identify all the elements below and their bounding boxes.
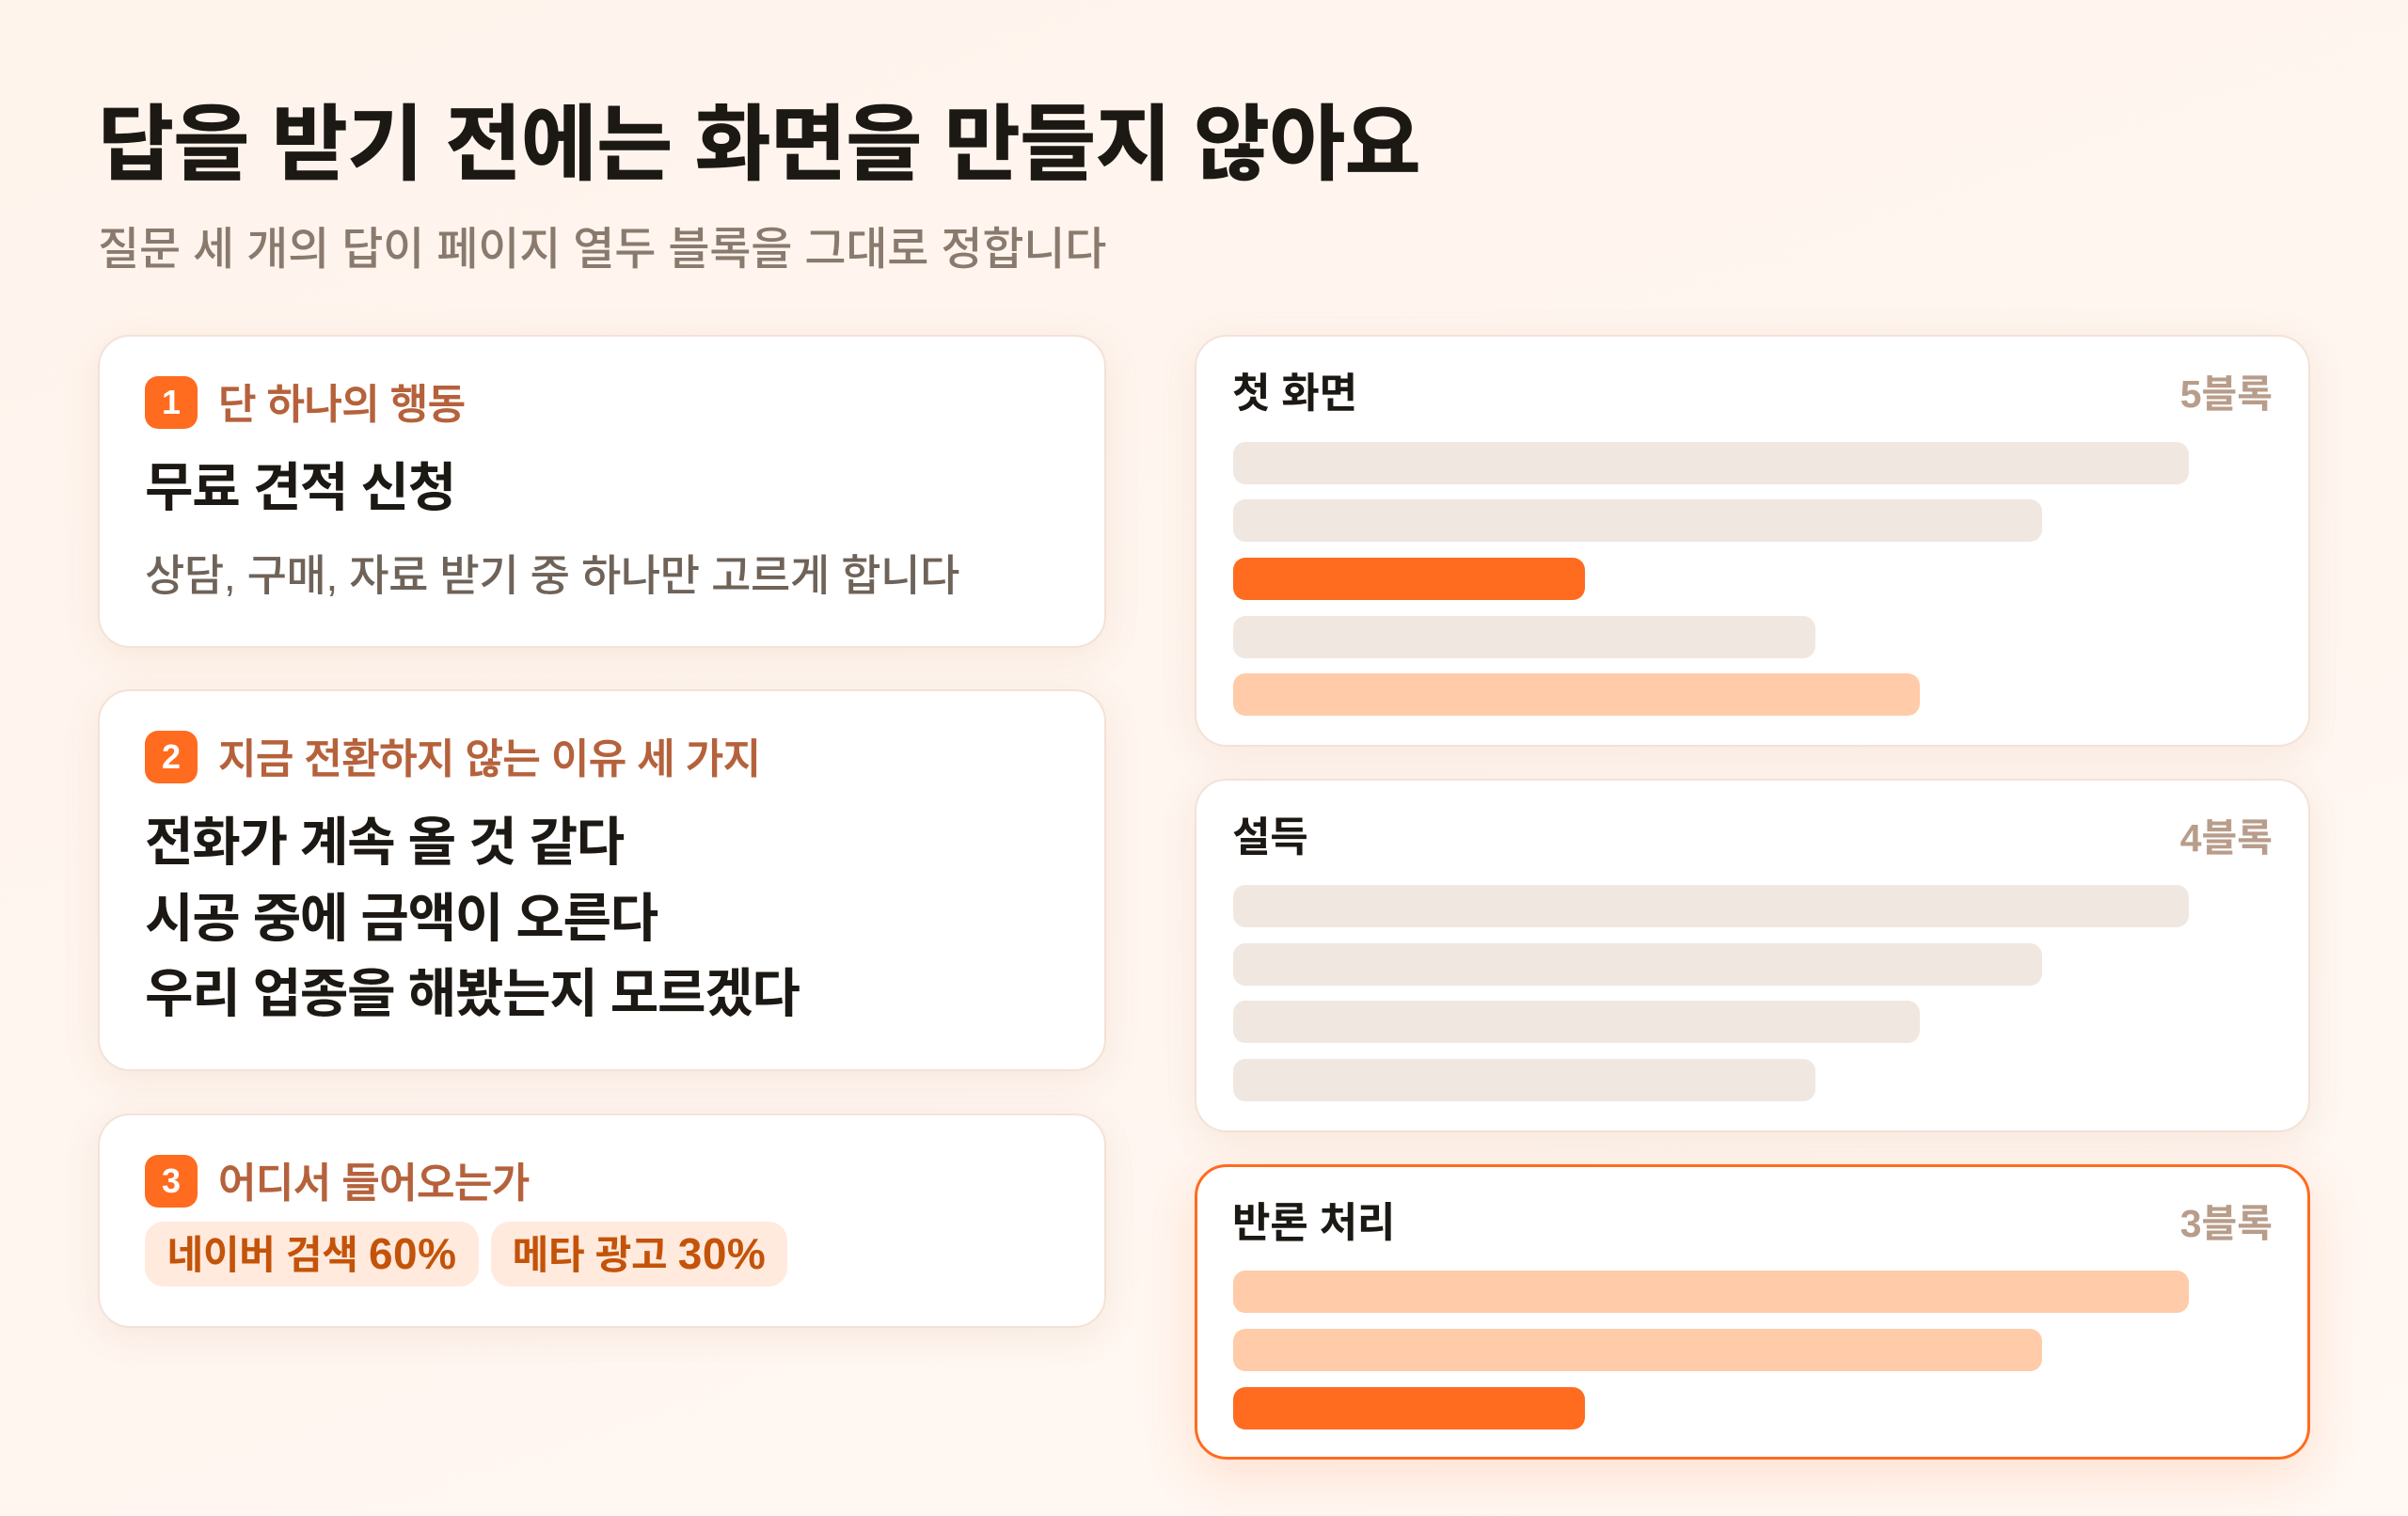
panel: question 1 [98,335,1106,648]
tag: naver search: 네이버 검색 60% [166,1229,457,1278]
tag: meta ads [491,1222,787,1287]
block 3 [1233,1387,1585,1429]
block 3 [1233,1001,1920,1043]
question 1 answer: 무료 견적 신청 [145,458,455,517]
block 3 [1233,558,1585,600]
section name: 설득 [1232,814,1308,861]
subtitle: 질문 세 개의 답이 페이지 열두 블록을 그대로 정합니다 [98,225,1106,275]
block 1 [1233,885,2189,927]
block 4 [1233,1059,1815,1101]
block 5 [1233,673,1920,716]
reason 1: 전화가 계속 올 것 같다 [145,813,624,872]
block 2 [1233,943,2042,986]
question 2 label: 지금 전환하지 않는 이유 세 가지 [218,736,761,782]
block count: 3블록 [2180,1202,2273,1245]
badge 3 [145,1155,198,1208]
block 4 [1233,616,1815,658]
badge 3: 3 [162,1161,181,1200]
badge 1 [145,376,198,429]
badge 2: 2 [162,737,181,776]
reason 3: 우리 업종을 해봤는지 모르겠다 [145,964,800,1023]
badge 1: 1 [162,383,181,421]
title: 답을 받기 전에는 화면을 만들지 않아요 [98,98,1420,191]
block 1 [1233,1271,2189,1313]
reason 2: 시공 중에 금액이 오른다 [145,889,657,948]
block 2 [1233,1329,2042,1371]
block count: 5블록 [2180,372,2273,416]
block 1 [1233,442,2189,484]
tag: naver search [145,1222,479,1287]
section name: 반론 처리 [1232,1200,1395,1246]
question 1 description: 상담, 구매, 자료 받기 중 하나만 고르게 합니다 [145,551,959,600]
panel: objection handling [1195,1164,2310,1460]
block 2 [1233,499,2042,542]
badge 2 [145,731,198,783]
panel: persuasion [1195,779,2310,1132]
question 3 label: 어디서 들어오는가 [218,1161,530,1207]
panel: first screen [1195,335,2310,747]
panel: question 3 [98,1113,1106,1328]
block count: 4블록 [2180,816,2273,860]
tag: meta ads: 메타 광고 30% [513,1229,766,1278]
panel: question 2 [98,689,1106,1071]
question 1 label: 단 하나의 행동 [218,382,466,428]
section name: 첫 화면 [1232,371,1357,417]
